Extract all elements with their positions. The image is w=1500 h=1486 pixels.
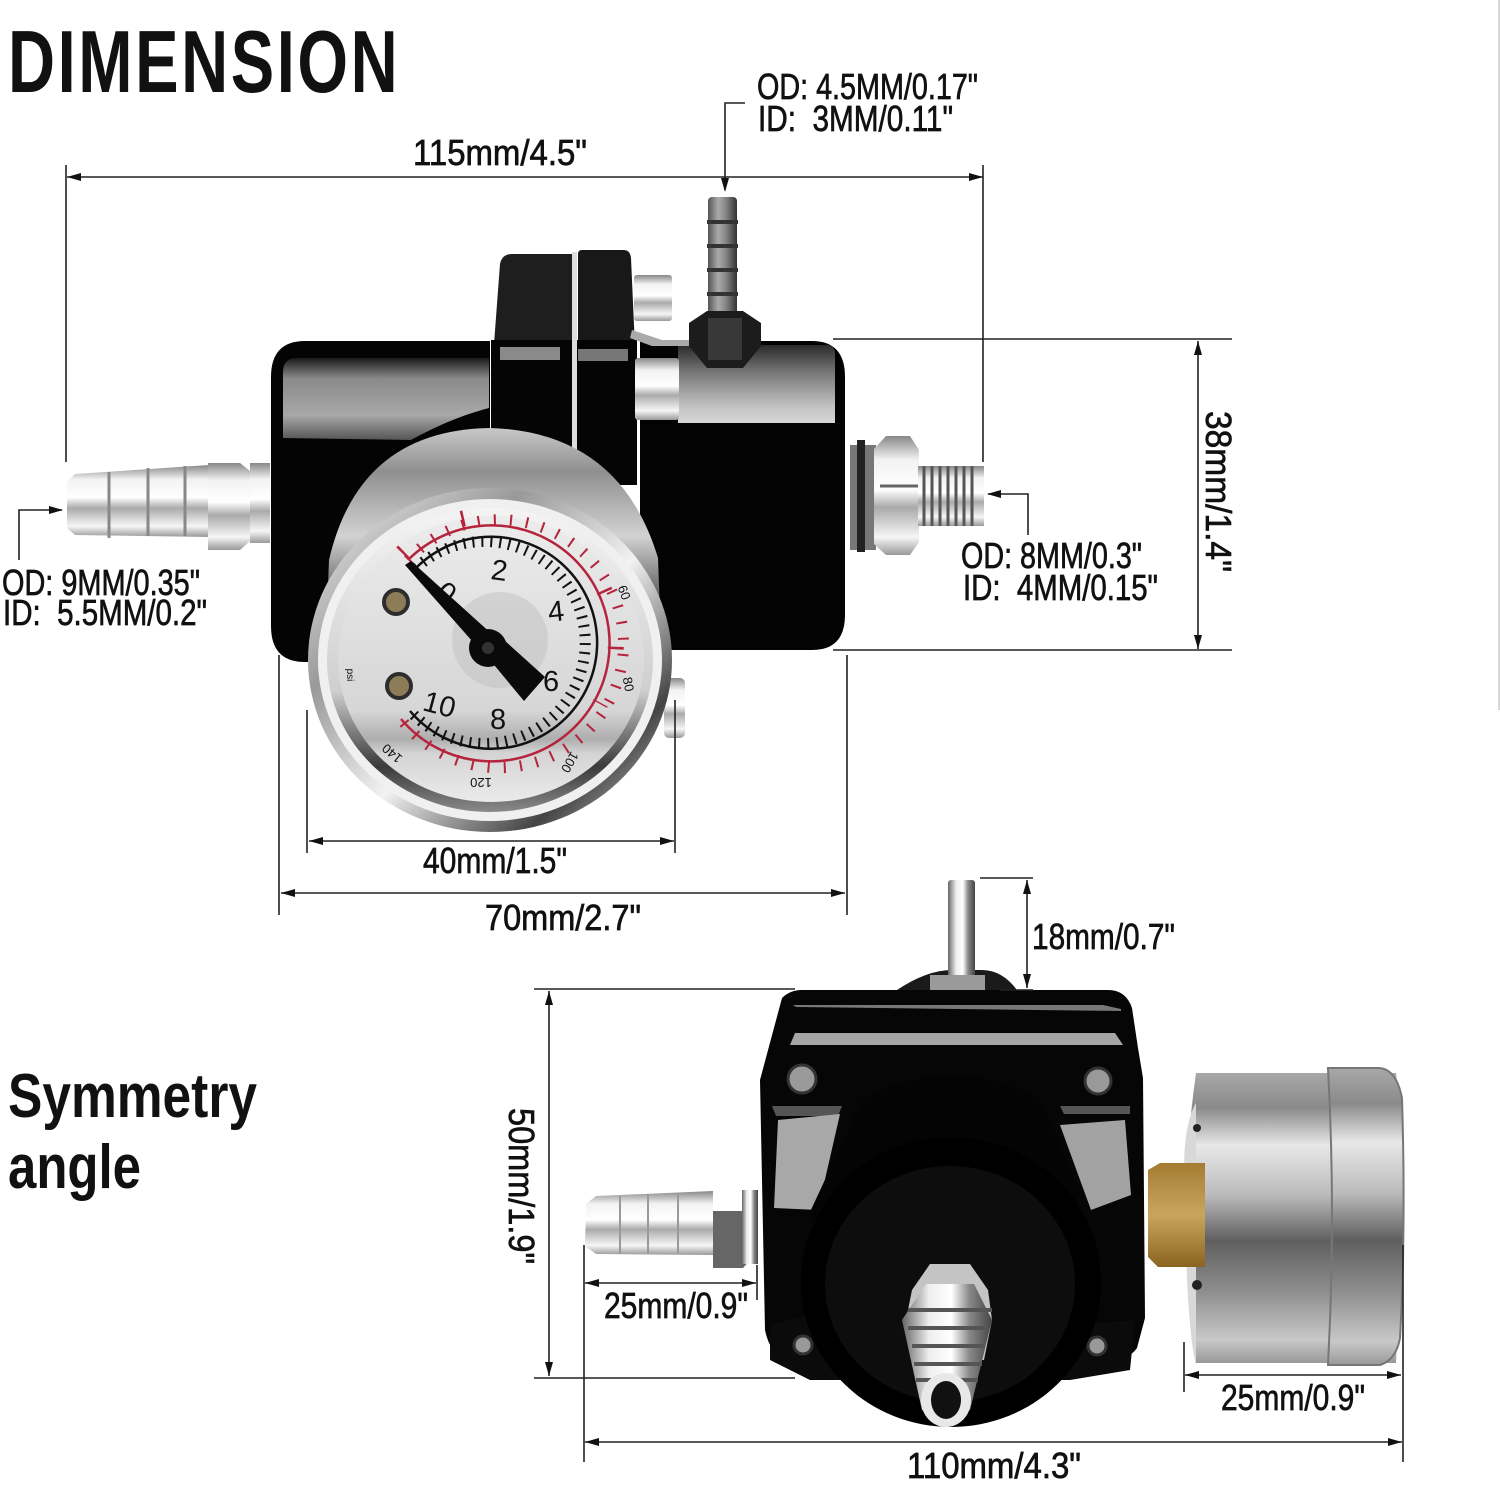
body screws bbox=[788, 1065, 1111, 1355]
label: left barb length: 25mm/0.9" bbox=[604, 1285, 748, 1326]
subtitle: symmetry angle: Symmetry bbox=[8, 1062, 257, 1131]
label: gauge width: 40mm/1.5" bbox=[423, 840, 567, 881]
gauge numerals: 0 bbox=[429, 576, 462, 611]
label: canister depth: 25mm/0.9" bbox=[1221, 1377, 1365, 1418]
gauge numerals: 140 bbox=[379, 741, 405, 766]
title: DIMENSION bbox=[8, 14, 400, 111]
subtitle: symmetry angle: angle bbox=[8, 1133, 141, 1202]
label: right fitting diameters bbox=[961, 535, 1158, 608]
gauge numerals: 100 bbox=[558, 749, 582, 775]
end barb fitting bbox=[902, 1264, 992, 1427]
label: right fitting diameters: OD: 8MM/0.3" bbox=[961, 535, 1142, 576]
gauge numerals: 4 bbox=[546, 595, 566, 629]
right threaded stud and nut bbox=[850, 436, 984, 555]
gauge numerals: 10 bbox=[420, 686, 459, 725]
gauge numerals: 60 bbox=[615, 583, 634, 602]
neck highlight bbox=[905, 1155, 1000, 1169]
gauge numerals: psi bbox=[344, 669, 355, 681]
label: left fitting diameters: OD: 9MM/0.35" bbox=[2, 562, 200, 603]
label: top fitting diameters bbox=[757, 66, 978, 139]
gauge numerals bbox=[344, 554, 637, 790]
top barb fitting bbox=[689, 197, 761, 368]
subtitle: symmetry angle bbox=[8, 1062, 257, 1202]
gauge numerals: 80 bbox=[620, 676, 637, 693]
pressure gauge bbox=[308, 428, 672, 832]
upper silver bolt bbox=[634, 275, 672, 321]
bracket bbox=[491, 250, 637, 485]
gauge numerals: 8 bbox=[490, 704, 506, 736]
face shadow bbox=[452, 592, 548, 688]
gauge numerals: 6 bbox=[543, 666, 559, 698]
label: top fitting diameters: ID: 3MM/0.11" bbox=[758, 98, 953, 139]
regulator front view photo bbox=[67, 197, 984, 832]
red psi scale bbox=[401, 515, 624, 768]
domed neck bbox=[810, 1076, 1080, 1312]
needle bbox=[405, 561, 545, 701]
small bolt right of gauge bbox=[664, 678, 685, 738]
left cylinder bbox=[271, 341, 490, 662]
label: right fitting diameters: ID: 4MM/0.15" bbox=[963, 567, 1158, 608]
gauge canister bbox=[1184, 1068, 1404, 1365]
lower silver bolt bbox=[630, 330, 692, 420]
left barb fitting bbox=[67, 463, 270, 550]
label: top tube height: 18mm/0.7" bbox=[1032, 916, 1175, 957]
left barb fitting bbox=[585, 1190, 758, 1268]
label: left fitting diameters: ID: 5.5MM/0.2" bbox=[3, 592, 207, 633]
body block bbox=[760, 990, 1145, 1380]
screws bbox=[384, 590, 411, 698]
label: overall side width: 110mm/4.3" bbox=[907, 1445, 1081, 1486]
label: left fitting diameters bbox=[2, 562, 207, 633]
label: body width: 70mm/2.7" bbox=[485, 897, 641, 938]
top tube bbox=[897, 880, 1017, 991]
label: overall length: 115mm/4.5" bbox=[413, 132, 587, 173]
end cap bbox=[801, 1137, 1101, 1427]
gauge numerals: 120 bbox=[470, 775, 492, 790]
label: top fitting diameters: OD: 4.5MM/0.17" bbox=[757, 66, 978, 107]
label: body height: 38mm/1.4" bbox=[1198, 411, 1239, 572]
gauge numerals: 2 bbox=[489, 554, 509, 588]
arrowheads bbox=[49, 173, 1402, 1446]
black bar scale bbox=[410, 537, 597, 749]
regulator side view photo bbox=[585, 880, 1404, 1427]
right cylinder bbox=[640, 341, 845, 650]
label: block height: 50mm/1.9" bbox=[501, 1108, 542, 1264]
brass fitting bbox=[1148, 1163, 1205, 1267]
